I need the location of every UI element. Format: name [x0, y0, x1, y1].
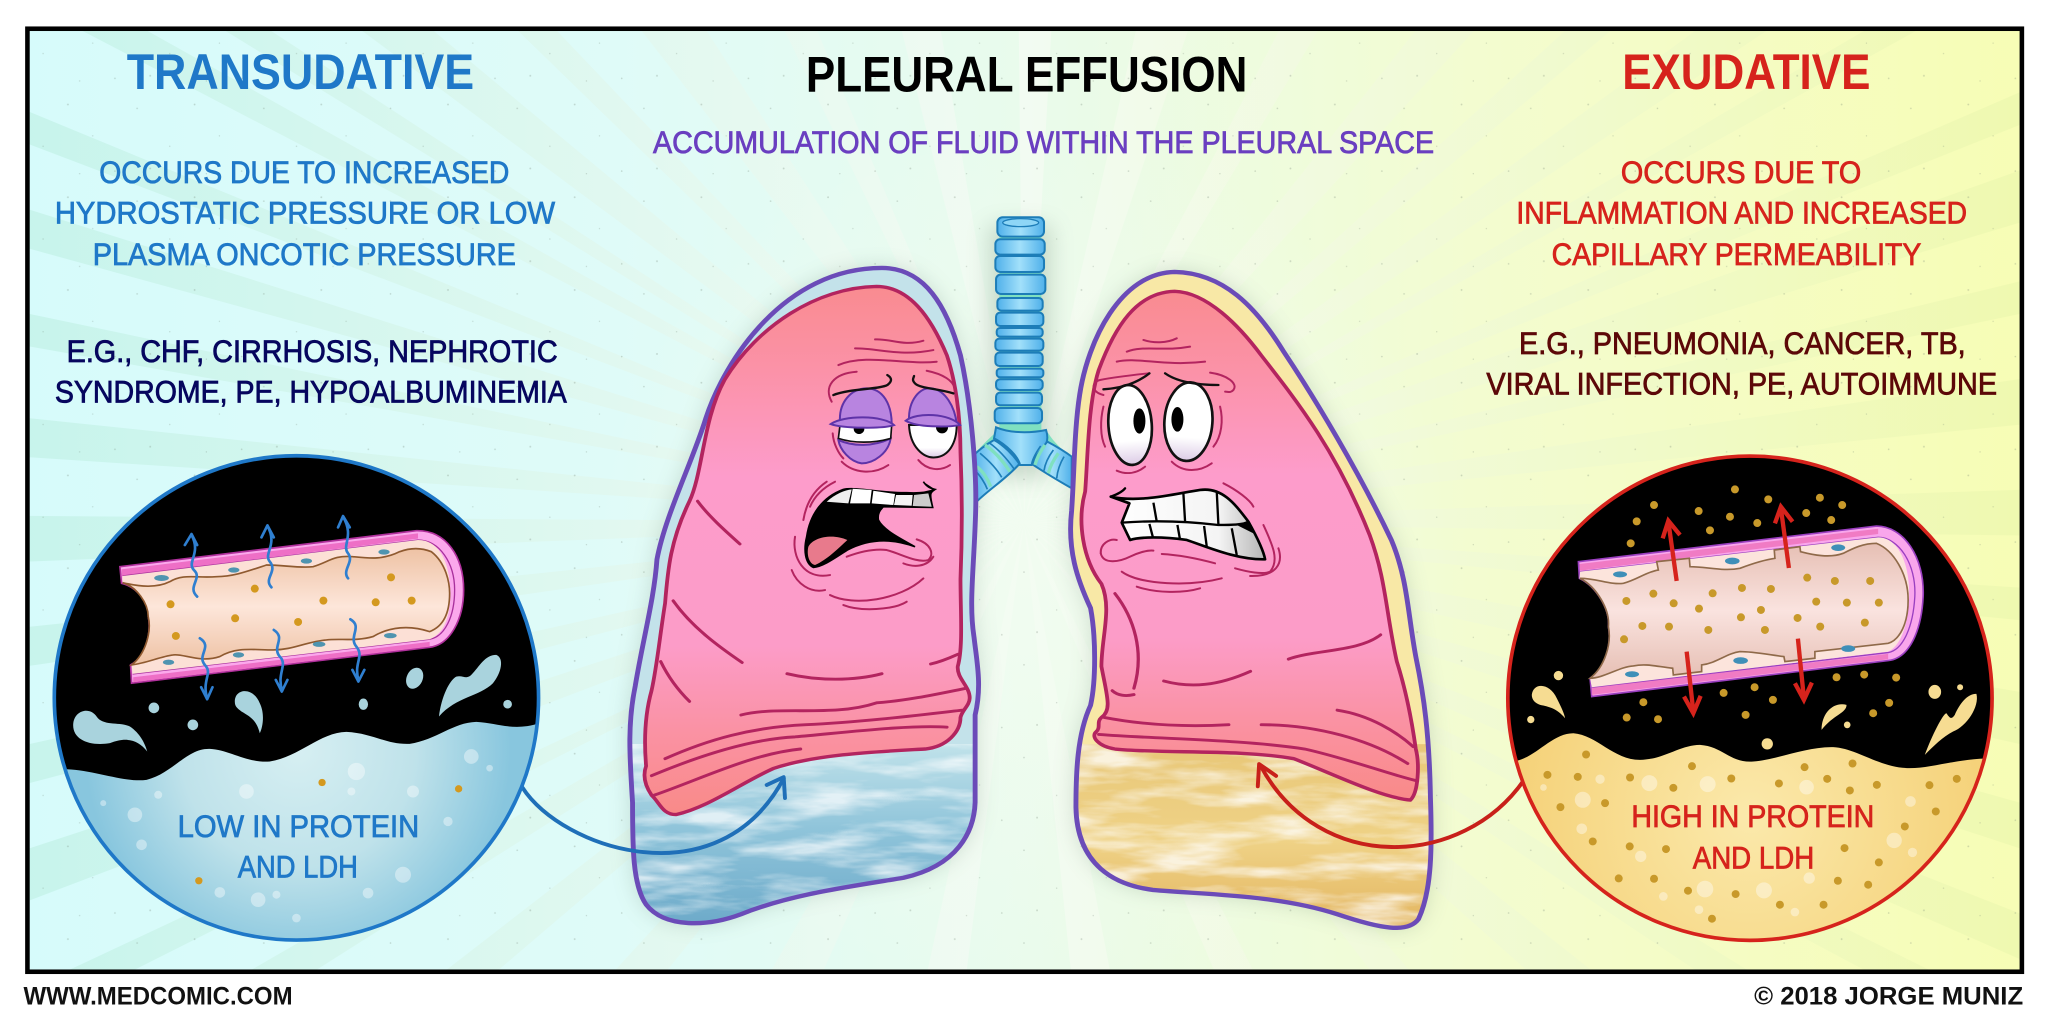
label: high in protein: HIGH IN PROTEIN	[1631, 799, 1874, 834]
label: low in protein	[178, 809, 419, 885]
blood vessel	[1578, 526, 1923, 697]
exudative description: INFLAMMATION AND INCREASED	[1516, 195, 1967, 230]
transudative circle	[40, 456, 560, 950]
lungs illustration	[622, 268, 1440, 939]
arrow: blue to transudative fluid	[522, 777, 785, 853]
exudative examples: VIRAL INFECTION, PE, AUTOIMMUNE	[1486, 366, 1997, 401]
fluid	[1518, 733, 1982, 938]
fluid	[67, 722, 536, 938]
transudative description: HYDROSTATIC PRESSURE OR LOW	[55, 195, 555, 230]
transudative description: PLASMA ONCOTIC PRESSURE	[93, 237, 516, 272]
right lung outer pleura with fluid	[1066, 272, 1440, 939]
scared eyes	[1106, 381, 1215, 466]
left lung body	[644, 286, 970, 815]
left lung face	[792, 339, 960, 609]
bubbles	[100, 749, 493, 922]
tired eye, right	[906, 388, 960, 457]
worried eyebrows	[1103, 373, 1218, 389]
exudative description: CAPILLARY PERMEABILITY	[1552, 237, 1921, 272]
endothelial nuclei	[154, 549, 397, 665]
exudative examples	[1486, 326, 1997, 401]
blood vessel	[120, 531, 464, 683]
footer: website: WWW.MEDCOMIC.COM	[24, 983, 293, 1010]
red arrows	[1663, 507, 1812, 713]
transudative description	[55, 155, 555, 272]
wrinkles and folds	[1094, 338, 1280, 592]
label: high in protein: AND LDH	[1693, 841, 1814, 876]
wrinkles and folds	[792, 339, 955, 609]
right lung body	[1082, 291, 1418, 800]
trachea	[973, 217, 1072, 502]
heading: exudative: EXUDATIVE	[1622, 44, 1870, 100]
exudative circle	[1490, 456, 2010, 950]
heading: transudative: TRANSUDATIVE	[127, 44, 474, 100]
transudative examples: SYNDROME, PE, HYPOALBUMINEMIA	[55, 374, 567, 409]
title: PLEURAL EFFUSION	[806, 46, 1247, 102]
open mouth	[805, 482, 935, 567]
soft shadow behind lungs	[630, 224, 1431, 928]
protein dots in vessel	[167, 573, 416, 640]
label: low in protein: LOW IN PROTEIN	[178, 809, 419, 844]
arrow: red to exudative fluid	[1258, 764, 1524, 847]
protein dots in fluid	[195, 779, 462, 884]
subtitle: ACCUMULATION OF FLUID WITHIN THE PLEURAL SPACE	[653, 125, 1434, 160]
bubbles	[1540, 774, 1917, 916]
transudative description: OCCURS DUE TO INCREASED	[99, 155, 509, 190]
label: high in protein	[1631, 799, 1874, 876]
transudative examples	[55, 334, 567, 409]
gritted teeth mouth	[1111, 488, 1265, 559]
exudative description	[1516, 155, 1967, 272]
transudative examples: E.G., CHF, CIRRHOSIS, NEPHROTIC	[67, 334, 558, 369]
droplets	[73, 655, 512, 752]
right lung face	[1094, 338, 1280, 592]
tired eye, left	[831, 388, 894, 463]
exudative description: OCCURS DUE TO	[1621, 155, 1861, 190]
wavy fluid arrows	[185, 516, 364, 699]
droplets	[1527, 671, 1977, 755]
footer: copyright: © 2018 JORGE MUNIZ	[1754, 983, 2023, 1010]
exudative examples: E.G., PNEUMONIA, CANCER, TB,	[1519, 326, 1966, 361]
eyebrows	[833, 375, 953, 395]
protein dots in vessel	[1620, 574, 1883, 643]
endothelial nuclei	[1613, 544, 1855, 677]
protein dots	[1543, 485, 1961, 923]
label: low in protein: AND LDH	[238, 850, 358, 885]
left lung outer pleura with fluid	[622, 268, 990, 934]
